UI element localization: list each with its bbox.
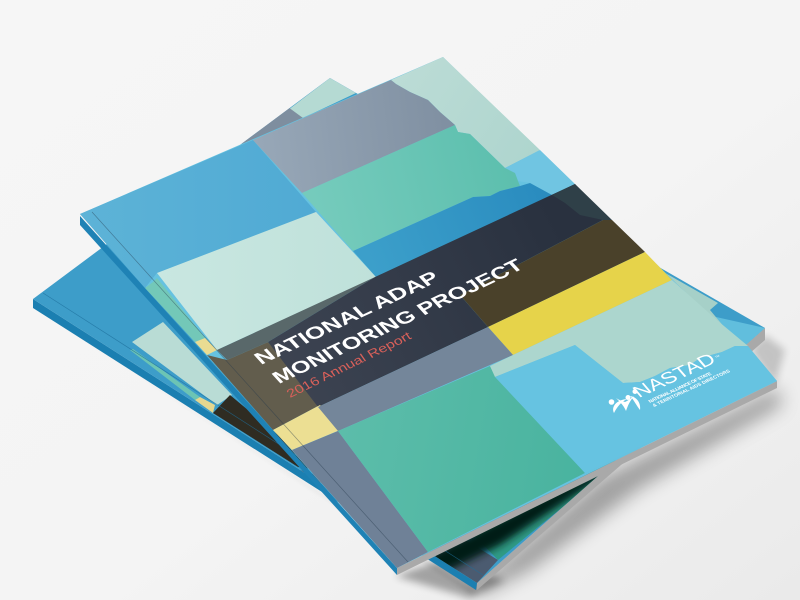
front report page edge [397, 381, 777, 575]
back report fold line [43, 293, 483, 575]
block: lower light blue [495, 345, 777, 473]
back report [33, 78, 765, 590]
band: dark center [268, 184, 603, 407]
band: olive brown [460, 220, 645, 327]
tagline line 1: NATIONAL ALLIANCE OF STATE [647, 371, 714, 404]
NASTAD logo [609, 349, 732, 413]
wordmark: NASTAD [628, 349, 720, 401]
block: teal spine sliver [145, 278, 205, 342]
block: yellow spine sliver [195, 338, 217, 355]
band: dark teal corner [552, 184, 612, 220]
block: top pale corner [391, 57, 540, 168]
title: MONITORING PROJECT [268, 256, 528, 388]
block: large teal [338, 366, 585, 552]
icon: people [609, 389, 640, 413]
front report [80, 57, 777, 575]
title: NATIONAL ADAP [250, 268, 444, 369]
block: pale state [490, 280, 748, 383]
front cover base [80, 57, 777, 568]
front fold line [92, 212, 408, 562]
subtitle: 2016 Annual Report [284, 329, 414, 400]
back report spine edge [33, 299, 477, 590]
block: light blue corner [505, 150, 575, 195]
band: grey strip [217, 277, 375, 360]
block: pale rectangle [157, 212, 376, 350]
block: yellow band [488, 252, 672, 355]
block: upper left blue [80, 140, 316, 288]
block: teal state [302, 125, 520, 251]
front report spine edge [80, 216, 397, 575]
block: grey band [318, 327, 513, 431]
block: pale yellow [273, 405, 340, 450]
trademark: TM [714, 354, 721, 359]
band: brown left [207, 342, 320, 430]
ground shadow [35, 308, 785, 598]
block: grey state [253, 80, 455, 193]
title [250, 256, 528, 388]
tagline line 2: & TERRITORIAL AIDS DIRECTORS [651, 368, 732, 408]
block: mid blue [353, 183, 552, 277]
back report color blocks [130, 78, 765, 583]
back report cover base [33, 78, 765, 583]
block: grey spine column [292, 431, 428, 568]
back report page edge [477, 328, 765, 590]
